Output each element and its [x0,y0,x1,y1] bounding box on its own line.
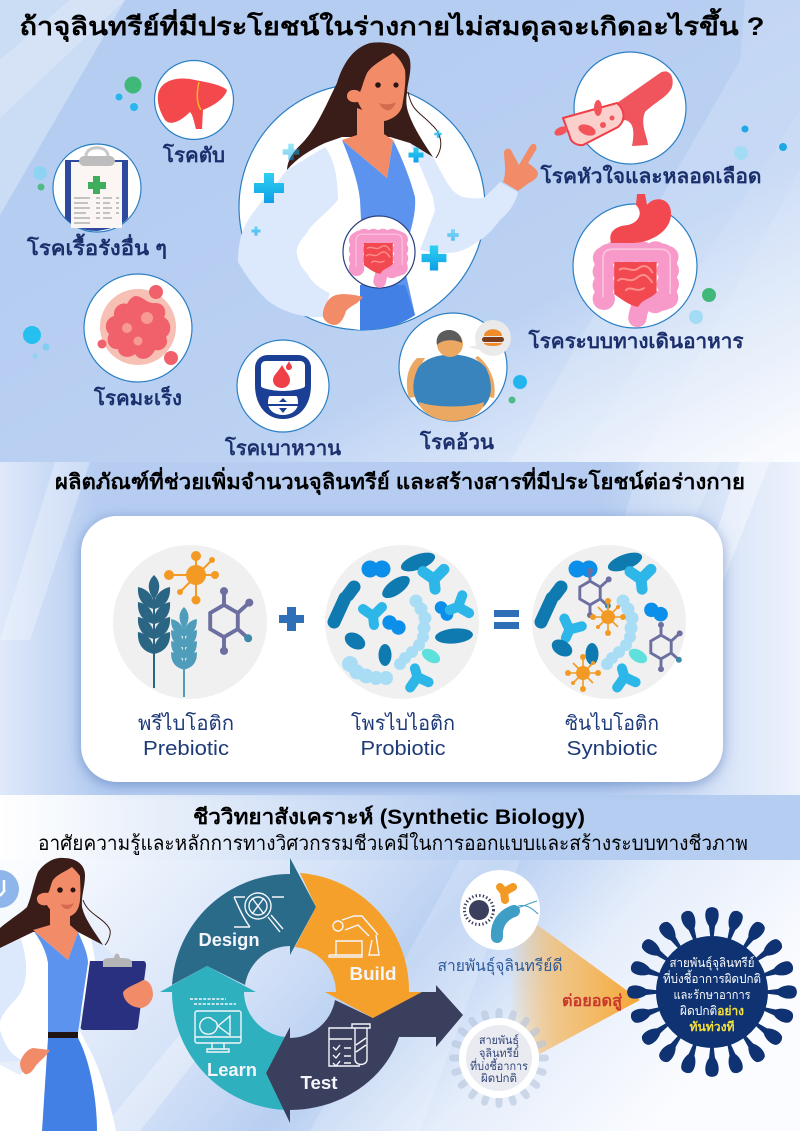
doctor backdrop circle [239,84,485,330]
icon: clipboard [65,148,128,231]
label: probiotic: โพรไบไอติก [351,712,455,735]
doctor dress [342,140,415,330]
hair strand [83,900,110,945]
doctor coat left side [238,147,338,317]
scientist right sleeve [70,930,120,962]
heading: products: ผลิตภัณฑ์ที่ช่วยเพิ่มจำนวนจุลินทรีย์ และสร้างสารที่มีประโยชน์ต่อร่างกาย [55,466,745,496]
icon: burger bubble [468,320,511,356]
icon: stomach [610,194,671,243]
icon: obese person [407,330,495,421]
section background: synthetic biology lower [0,860,800,1131]
icon: blue bacterium [497,901,538,937]
holding hand [123,980,153,1008]
panel: doctor illustration [238,42,538,330]
icon: learn monitor [190,999,241,1052]
scientist dress [33,930,88,1033]
panel: abnormal-indicating strain [449,1008,549,1108]
icon: intestines [603,249,670,318]
label: synbiotic [565,712,659,760]
icon: orange Y cell [500,887,513,900]
doctor eyes and mouth [375,82,399,110]
label: prebiotic: Prebiotic [143,738,229,760]
scientist neck [33,908,78,960]
synbiotic illustration [532,545,686,699]
clipboard [81,954,146,1030]
abnormal-indicating strain text [470,1033,528,1085]
icon: blood vessel [600,71,673,146]
outcome text: สายพันธุ์จุลินทรีย์ [670,956,754,971]
abnormal-indicating strain text: สายพันธุ์ [479,1033,519,1047]
label: good strain: สายพันธุ์จุลินทรีย์ดี [438,956,562,976]
plus icons [252,130,459,270]
disease: obesity [399,313,511,421]
abnormal-indicating strain text: จุลินทรีย์ [479,1046,519,1060]
outcome text: ทันท่วงที [690,1020,734,1034]
abnormal-indicating strain text: ผิดปกติ [481,1072,517,1085]
doctor face [347,53,405,122]
scientist trousers [42,1038,97,1131]
label: cancer: โรคมะเร็ง [93,385,182,410]
wheat stalk dark [138,575,170,688]
outcome text: และรักษาอาการ [674,988,751,1002]
disease: liver [154,60,234,140]
label: build: Build [350,964,396,984]
icon: liver [158,79,227,129]
label: synbiotic: ซินไบโอติก [565,712,659,735]
icon: design magnifier [234,893,284,932]
label: prebiotic [138,712,234,760]
doctor hair [287,42,433,170]
segment: design [172,858,316,985]
scientist coat [0,928,116,1131]
section background: products [0,462,800,795]
label: probiotic [351,712,455,760]
panel: good strain [460,870,540,950]
scientist face [37,867,80,917]
waist hand [20,1048,50,1074]
heading: synthetic biology: ชีววิทยาสังเคราะห์ (Synthetic Biology) [193,805,585,829]
label: obesity: โรคอ้วน [419,430,494,454]
orange molecule [164,551,219,604]
label: learn: Learn [207,1060,257,1080]
waist hand [323,294,363,325]
panel: scientist with clipboard [0,858,153,1131]
icon fragment circle [0,870,19,908]
abnormal-indicating strain text: ที่บ่งชี้อาการ [470,1058,528,1073]
scientist hair [0,858,103,948]
decorative bubbles [23,76,787,404]
purple molecule [210,587,253,655]
icon: tumour [106,296,170,359]
panel: outcome virus badge [627,907,797,1077]
section background: synthetic biology header [0,795,800,860]
disease: digestive [573,194,697,328]
pointing hand [503,144,538,191]
subheading: synthetic biology: อาศัยความรู้และหลักการทางวิศวกรรมชีวเคมีในการออกแบบและสร้างระบบทางชีวภาพ [38,832,748,856]
label: liver disease: โรคตับ [162,143,225,167]
chart: design-build-test-learn cycle [160,858,463,1123]
label: design: Design [198,930,260,950]
doctor neck [342,108,393,178]
prebiotic illustration [113,545,267,699]
label: leads to: ต่อยอดสู่ [562,993,622,1012]
doctor sleeve [410,143,518,253]
liver ligament [197,82,201,110]
label: test: Test [300,1073,338,1093]
label: probiotic: Probiotic [360,738,446,760]
scientist eyes and mouth [57,887,76,909]
label: prebiotic: พรีไบโอติก [138,712,234,735]
segment: test with output arrow [266,985,463,1123]
label: heart and vessel disease: โรคหัวใจและหลอดเลือด [539,164,762,188]
segment: build [295,873,422,1018]
label: synbiotic: Synbiotic [566,738,658,760]
disease: heart and vessels [553,52,686,164]
icon: glucose meter [255,355,311,419]
panel: products card [81,516,723,782]
outcome text: ที่บ่งชี้อาการผิดปกติ [663,969,761,986]
hair strand [408,92,441,158]
icon: test checklist and tube [329,1024,370,1066]
icon: spiky microbe [464,896,494,924]
scientist sleeve left [0,935,30,1062]
disease: cancer [84,274,192,382]
arrow: strain cone [510,905,640,1070]
label: digestive disease: โรคระบบทางเดินอาหาร [527,329,744,353]
scientist belt [48,1032,78,1038]
equals sign [494,610,519,629]
outcome text [663,956,761,1034]
outcome text: ผิดปกติอย่าง [680,1004,744,1018]
disease: chronic [53,144,141,232]
wheat stalk light [171,607,197,697]
disease: diabetes [237,340,329,432]
icon: build robot arm [329,916,379,957]
segment: learn [160,966,290,1110]
doctor coat white panel [297,140,362,330]
probiotic illustration [325,545,479,699]
title: ถ้าจุลินทรีย์ที่มีประโยชน์ในร่างกายไม่สมดุลจะเกิดอะไรขึ้น ? [20,7,764,43]
section background: diseases [0,0,800,462]
label: other chronic diseases: โรคเรื้อรังอื่น ๆ [26,233,167,260]
plus sign [279,607,304,631]
intestine inset [343,216,415,288]
label: diabetes: โรคเบาหวาน [224,436,341,460]
